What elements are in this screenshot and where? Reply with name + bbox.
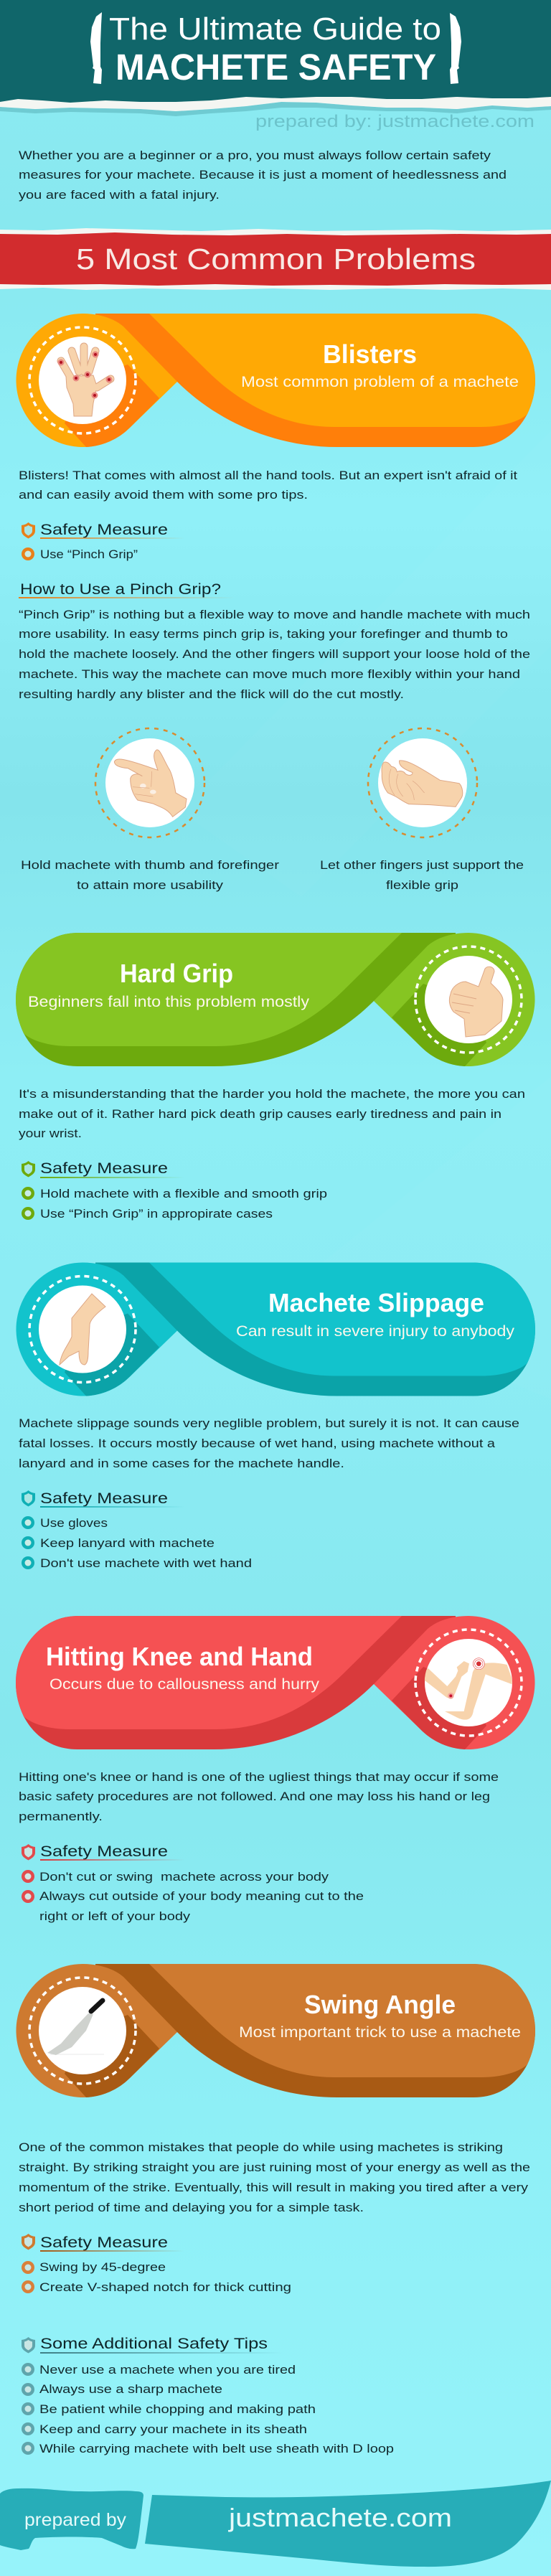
footer: machete handle with prepared by — [0, 2488, 143, 2550]
banner subtitle: swing angle: Most important trick to use a machete — [239, 2024, 521, 2041]
icon: pinch grip forefinger and thumb — [95, 728, 204, 837]
header band — [0, 0, 551, 116]
section heading band: 5 most common problems — [0, 228, 551, 290]
text: pinch grip explanation: resulting hardly any blister and the flick will do the cut mostly. — [19, 687, 404, 701]
caption: right hand — [320, 858, 524, 892]
banner heading: hard grip: Hard Grip — [120, 959, 233, 988]
icon: thumbs up hand — [449, 967, 503, 1037]
text: swing angle description: One of the common mistakes that people do while using machetes is striking — [19, 2140, 503, 2154]
list item: Use “Pinch Grip” in appropirate cases — [40, 1207, 273, 1221]
panel: hard grip banner — [16, 933, 535, 1066]
list item: Hold machete with a flexible and smooth grip — [40, 1187, 327, 1200]
icon: shield — [22, 2337, 35, 2354]
caption: right hand: flexible grip — [386, 878, 458, 892]
list item: Keep and carry your machete in its sheath — [39, 2422, 307, 2436]
banner subtitle: blisters: Most common problem of a machete — [241, 374, 519, 390]
icon: left machete — [90, 12, 102, 84]
subheading: how to use a pinch grip: How to Use a Pinch Grip? — [20, 581, 221, 598]
text: swing angle description: straight. By striking straight you are just ruining most of your energy as well as the — [19, 2161, 530, 2174]
text: hard grip description: make out of it. Rather hard pick death grip causes early tiredness and pain in — [19, 1107, 501, 1121]
banner heading: hitting knee and hand: Hitting Knee and Hand — [46, 1642, 313, 1671]
list item — [22, 1889, 364, 1923]
list item: Never use a machete when you are tired — [39, 2363, 296, 2377]
panel: swing angle banner — [16, 1964, 535, 2097]
list item: Create V-shaped notch for thick cutting — [39, 2280, 291, 2294]
icon: hand with blisters — [57, 347, 112, 416]
icon: machete — [47, 2001, 104, 2055]
panel: swing angle safety measure — [22, 2234, 291, 2294]
intro text: Whether you are a beginner or a pro, you must always follow certain safety — [19, 149, 491, 162]
panel: blisters safety measure — [22, 522, 184, 561]
caption: left hand: to attain more usability — [77, 878, 224, 892]
icon: shield — [22, 1161, 35, 1177]
section heading band: 5 most common problems: 5 Most Common Problems — [76, 243, 476, 276]
list item: Don't cut or swing machete across your body — [39, 1870, 329, 1884]
icon: pinch grip supporting fingers — [368, 728, 477, 837]
list item: Use “Pinch Grip” — [40, 547, 138, 561]
icon: shield — [22, 2234, 35, 2250]
text: pinch grip explanation: machete. This way the machete can move much more flexibly within your hand — [19, 667, 520, 681]
footer: machete blade with website: justmachete.com — [228, 2503, 452, 2532]
panel: hitting knee safety measure: Safety Measure — [40, 1843, 168, 1860]
banner heading: blisters: Blisters — [323, 339, 417, 369]
banner heading: machete slippage: Machete Slippage — [268, 1288, 484, 1317]
icon: injured knee and elbow — [425, 1658, 514, 1720]
title: MACHETE SAFETY — [116, 47, 436, 88]
text: swing angle description — [19, 2140, 530, 2214]
panel: additional safety tips: Some Additional Safety Tips — [40, 2336, 268, 2352]
icon: slipping hand — [60, 1294, 105, 1365]
list item: right or left of your body — [39, 1909, 191, 1923]
icon: shield — [22, 1490, 35, 1507]
list item: Keep lanyard with machete — [40, 1536, 215, 1550]
list item: Be patient while chopping and making path — [39, 2402, 316, 2416]
text: slippage description: fatal losses. It occurs mostly because of wet hand, using machete without a — [19, 1437, 496, 1450]
list item: Always use a sharp machete — [39, 2382, 222, 2396]
intro text: you are faced with a fatal injury. — [19, 188, 220, 202]
panel: machete slippage banner — [16, 1263, 535, 1396]
text: pinch grip explanation: more usability. In easy terms pinch grip is, taking your forefinger and thumb to — [19, 627, 508, 641]
panel: hard grip safety measure: Safety Measure — [40, 1160, 168, 1177]
panel: hard grip safety measure — [22, 1160, 327, 1221]
list item: Swing by 45-degree — [39, 2260, 166, 2274]
text: blisters description: Blisters! That comes with almost all the hand tools. But an expert isn't afraid of it — [19, 469, 517, 482]
text: slippage description: Machete slippage sounds very neglible problem, but surely it is not. It can cause — [19, 1416, 519, 1430]
intro text: measures for your machete. Because it is just a moment of heedlessness and — [19, 168, 507, 182]
text: hard grip description: It's a misunderstanding that the harder you hold the machete, the more you can — [19, 1087, 525, 1101]
text: blisters description — [19, 469, 517, 502]
icon: shield — [22, 1844, 35, 1860]
text: hard grip description — [19, 1087, 525, 1140]
text: hitting knee description: basic safety procedures are not followed. And one may loss his hand or leg — [19, 1790, 490, 1803]
panel: hitting knee and hand banner — [16, 1616, 535, 1749]
panel: hitting knee safety measure — [22, 1843, 364, 1923]
footer: machete blade with website — [145, 2481, 551, 2567]
title: The Ultimate Guide to — [109, 11, 441, 47]
banner heading: swing angle: Swing Angle — [304, 1990, 456, 2019]
panel: slippage safety measure: Safety Measure — [40, 1490, 168, 1507]
text: pinch grip explanation: hold the machete loosely. And the other fingers will support your loose hold of the — [19, 647, 530, 661]
caption: left hand: Hold machete with thumb and forefinger — [21, 858, 279, 872]
caption: left hand — [21, 858, 279, 892]
text: hitting knee description — [19, 1770, 499, 1823]
text: slippage description — [19, 1416, 519, 1470]
title — [109, 11, 441, 88]
list item: While carrying machete with belt use sheath with D loop — [39, 2442, 394, 2455]
text: blisters description: and can easily avoid them with some pro tips. — [19, 488, 308, 502]
text: hitting knee description: permanently. — [19, 1810, 103, 1823]
panel: swing angle safety measure: Safety Measure — [40, 2234, 168, 2251]
text: hitting knee description: Hitting one's knee or hand is one of the ugliest things that may occur if some — [19, 1770, 499, 1784]
text: swing angle description: short period of time and delaying you for a simple task. — [19, 2201, 364, 2214]
list item: Use gloves — [40, 1516, 108, 1530]
footer: machete handle with prepared by: prepared by — [24, 2510, 127, 2530]
list item: Always cut outside of your body meaning cut to the — [39, 1889, 364, 1903]
icon: shield — [22, 522, 35, 538]
panel: blisters banner — [16, 314, 535, 447]
text: pinch grip explanation: “Pinch Grip” is nothing but a flexible way to move and handle machete with much — [19, 608, 530, 621]
panel: blisters safety measure: Safety Measure — [40, 522, 168, 538]
banner subtitle: hard grip: Beginners fall into this problem mostly — [28, 994, 310, 1010]
text: slippage description: lanyard and in some cases for the machete handle. — [19, 1457, 344, 1470]
text: pinch grip explanation — [19, 608, 530, 701]
banner subtitle: machete slippage: Can result in severe injury to anybody — [236, 1323, 515, 1340]
text: swing angle description: momentum of the strike. Eventually, this will result in making you tired after a very — [19, 2181, 529, 2194]
panel: slippage safety measure — [22, 1490, 252, 1570]
banner subtitle: hitting knee and hand: Occurs due to callousness and hurry — [50, 1676, 320, 1693]
text: hard grip description: your wrist. — [19, 1127, 82, 1140]
panel: additional safety tips — [22, 2336, 394, 2455]
list item: Don't use machete with wet hand — [40, 1556, 252, 1570]
icon: right machete — [450, 13, 461, 84]
caption: right hand: Let other fingers just support the — [320, 858, 524, 872]
intro text — [19, 149, 507, 202]
prepared by line: prepared by: justmachete.com — [255, 112, 534, 131]
